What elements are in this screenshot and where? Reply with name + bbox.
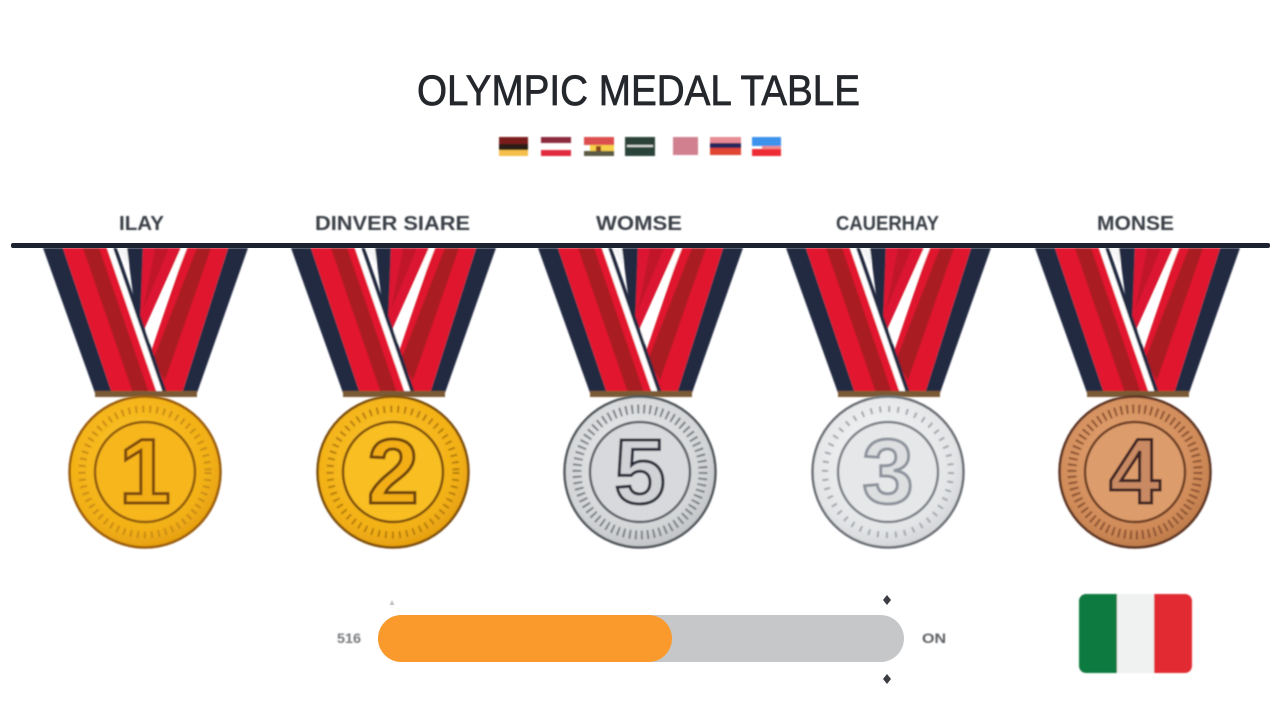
tick mark bottom-right <box>883 674 891 684</box>
medal 2: gold <box>318 396 468 548</box>
progress bar <box>337 595 946 684</box>
flag: red and white <box>541 137 571 156</box>
horizontal bar <box>11 243 1270 248</box>
bar fill <box>378 615 672 662</box>
column labels <box>119 213 1174 235</box>
flag: dusty pink <box>673 137 698 155</box>
medal 5: bronze <box>1060 396 1210 548</box>
medal 3: silver: 5 <box>614 421 666 523</box>
medal 1: gold: 1 <box>119 421 171 523</box>
bar left label: 516 <box>337 630 361 646</box>
bar track <box>378 615 904 662</box>
flag: pink navy red <box>710 137 741 155</box>
ribbon 2 <box>291 248 496 397</box>
tick mark top-right <box>883 595 891 605</box>
medal 4: silver: 3 <box>862 421 914 523</box>
label: column 1: ILAY <box>119 213 165 235</box>
label: column 5: MONSE <box>1097 213 1174 235</box>
label: column 4: CAUERHAY <box>836 213 940 235</box>
title: OLYMPIC MEDAL TABLE <box>417 67 860 115</box>
medal 3: silver <box>564 396 716 548</box>
ribbon 5 <box>1035 248 1240 397</box>
ribbons <box>43 248 1240 397</box>
medal 1: gold <box>70 396 220 548</box>
ribbon 4 <box>786 248 991 397</box>
bar right label: ON <box>922 630 946 646</box>
ribbon 3 <box>538 248 743 397</box>
label: column 3: WOMSE <box>596 213 682 235</box>
flag row <box>499 137 781 156</box>
tick mark top-left <box>390 600 394 605</box>
label: column 2: DINVER SIARE <box>315 213 470 235</box>
flag: dark red and yellow <box>499 137 528 156</box>
medal 4: silver <box>812 396 964 548</box>
icon: Italian flag <box>1079 594 1192 673</box>
flag: dark green <box>625 137 655 156</box>
ribbon 1 <box>43 248 248 397</box>
medal 2: gold: 2 <box>367 421 419 523</box>
flag: blue and red <box>752 137 781 156</box>
flag: red yellow olive <box>584 137 614 156</box>
medal 5: bronze: 4 <box>1109 421 1161 523</box>
